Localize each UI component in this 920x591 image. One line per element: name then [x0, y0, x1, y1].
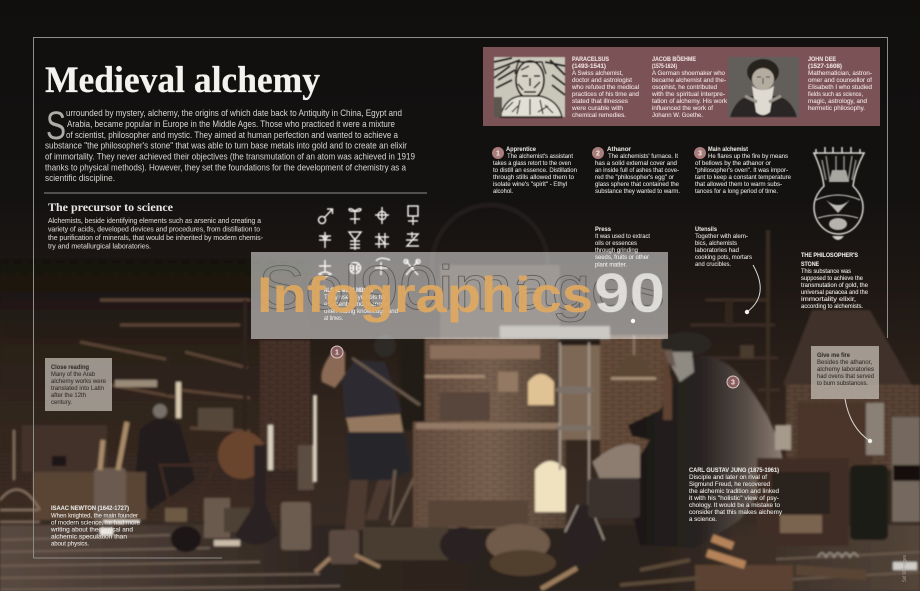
note: Carl Gustav Jung: Disciple and later on rival of — [689, 474, 767, 481]
callout: close reading: after the 12th — [51, 392, 87, 399]
callout: close reading: century. — [51, 399, 72, 406]
floor planks — [0, 520, 920, 591]
portrait: John Dee — [728, 57, 799, 117]
callout: give me fire: Give me fire — [817, 352, 851, 359]
numbered note: apprentice — [492, 146, 578, 195]
note: press: It was used to extract — [595, 233, 650, 240]
furnace glowing windows — [528, 374, 566, 512]
text: John Dee — [808, 56, 873, 112]
note: press: through grinding — [595, 247, 639, 254]
symbol: wheel — [350, 262, 361, 273]
numbered note: main alchemist — [694, 146, 792, 195]
bright pot at hands — [588, 444, 640, 518]
left shelves with books — [80, 300, 250, 450]
note: alchemic symbols: ALCHEMIC SYMBOLS — [324, 287, 373, 294]
note: the philosopher's stone: supposed to achieve the — [801, 275, 864, 282]
numbered note: apprentice: Apprentice — [506, 146, 537, 153]
numbered note: main alchemist: 3 — [698, 150, 702, 158]
numbered note: athanor: The alchemists' furnace. It — [608, 153, 678, 160]
text: Jacob Böehme: tation of alchemy. His work — [652, 98, 728, 105]
note: alchemic symbols: They used symbols for — [324, 294, 386, 301]
text: John Dee: (1527-1608) — [808, 63, 842, 70]
numbered note: main alchemist: tant to keep a constant temperature — [695, 174, 792, 181]
bottle and metal can on right — [775, 403, 920, 540]
stick on floor — [541, 568, 577, 589]
section body: variety of acids, developed devices and procedures, from distillation to — [48, 226, 260, 234]
note: press: seeds, fruits or other — [595, 254, 649, 261]
note: alchemic symbols — [324, 287, 399, 322]
symbol: scissors cross — [404, 260, 420, 275]
note: Carl Gustav Jung: it with his "holistic" view of psy- — [689, 495, 779, 502]
note: press: oils or essences — [595, 240, 637, 247]
text: John Dee: Elisabeth I who studied — [808, 84, 873, 91]
furnace step — [363, 527, 448, 560]
note: Isaac Newton: When knighted, the main founder — [51, 512, 138, 520]
note: Carl Gustav Jung: Sigmund Freud, he recovered — [689, 481, 771, 488]
hanging lamp — [611, 335, 656, 380]
text: Jacob Böehme: influenced the work of — [652, 105, 713, 112]
note: the philosopher's stone — [801, 252, 869, 310]
numbered note: apprentice: takes a glass retort to the oven — [493, 160, 572, 167]
credit: Sol 90 Images — [902, 555, 908, 582]
callout: give me fire: had ovens that served — [817, 373, 875, 380]
apprentice mortar and sticks — [315, 530, 380, 572]
symbol: hash — [375, 233, 389, 248]
note: Isaac Newton: writing about theological and — [50, 526, 134, 534]
note: utensils: Together with alem- — [695, 233, 748, 240]
note: press: plant matter. — [595, 262, 627, 268]
text: Paracelsus — [571, 56, 640, 119]
numbered note: athanor: red the "philosopher's egg" or — [595, 174, 674, 181]
note: utensils: laboratories had — [695, 247, 740, 254]
leader line: give me fire — [845, 399, 872, 443]
note: Isaac Newton: of modern science, he had more — [51, 520, 141, 526]
note: Carl Gustav Jung: chology. It would be a mistake to — [689, 502, 781, 509]
note: the philosopher's stone: according to alchemists. — [801, 303, 863, 310]
numbered note: apprentice: to distill an essence. Distillation — [493, 167, 578, 174]
note: press: Press — [595, 226, 612, 233]
intro text block: scientific discipline. — [45, 173, 115, 183]
portrait: Paracelsus engraving — [494, 57, 565, 117]
text: John Dee: fields such as science, — [808, 91, 863, 98]
text: Paracelsus: chemical remedies. — [572, 112, 626, 119]
text: Jacob Böehme: JACOB BÖEHME — [652, 56, 696, 63]
back wall and faint dome — [0, 205, 670, 520]
text: Paracelsus: PARACELSUS — [572, 56, 609, 63]
section body: try and metallurgical laboratories. — [48, 244, 151, 250]
numbered note: athanor — [592, 146, 680, 195]
numbered note: main alchemist: of bellows by the athanor or — [695, 160, 771, 167]
intro text block: urrounded by mystery, alchemy, the origins of which date back to Antiquity in China, Egypt and — [66, 108, 402, 118]
note: utensils: cooking pots, mortars — [695, 254, 752, 261]
text: John Dee: magic, astrology, and — [808, 98, 868, 105]
text: Jacob Böehme: osophist, he contributed — [652, 84, 718, 91]
round flask — [562, 505, 606, 568]
watermark number: 90 — [594, 261, 665, 324]
text: John Dee: Mathematician, astron- — [808, 70, 872, 77]
text: Paracelsus: A Swiss alchemist, — [572, 70, 623, 77]
watermark panel — [251, 252, 668, 339]
marker 1 on apprentice — [331, 346, 343, 358]
note: press — [595, 226, 650, 268]
numbered note: main alchemist: that allowed them to warm subs- — [695, 181, 782, 188]
callout: give me fire: to burn substances. — [817, 380, 868, 387]
numbered note: athanor: substance they wanted to warm. — [595, 188, 680, 195]
left candles — [176, 382, 273, 470]
numbered note: apprentice: The alchemist's assistant — [507, 153, 573, 160]
note: Isaac Newton — [50, 505, 141, 548]
apprentice tall candle — [313, 395, 317, 482]
watermark orange word: Infographics — [257, 267, 593, 323]
title: Medieval alchemy — [45, 60, 320, 101]
note: the philosopher's stone: STONE — [801, 261, 819, 268]
intro text block: of scientist, philosopher and mystic. They aimed at human perfection and wanted to achieve a — [66, 130, 399, 140]
main alchemist in robe — [625, 332, 783, 548]
callout: give me fire: Besides the athanor, — [817, 359, 872, 366]
callout: give me fire — [811, 346, 879, 399]
note: the philosopher's stone: universal panacea and the — [801, 289, 869, 296]
press leader dot — [631, 319, 635, 323]
numbered note: apprentice: 1 — [496, 150, 500, 158]
note: utensils: Utensils — [695, 226, 718, 233]
note: alchemic symbols: at times. — [324, 315, 343, 322]
callout: close reading: Close reading — [51, 364, 89, 371]
callout: close reading: Many of the Arab — [51, 371, 96, 378]
note: the philosopher's stone: This substance was — [801, 268, 851, 275]
numbered note: athanor: Athanor — [607, 146, 632, 153]
note: Carl Gustav Jung — [689, 467, 783, 523]
note: the philosopher's stone: transmutation of gold, the — [801, 282, 869, 289]
intro text block — [45, 104, 415, 183]
note: alchemic symbols: elements and planets, — [324, 301, 389, 308]
numbered note: athanor: 2 — [596, 150, 600, 158]
symbol: mound cross — [319, 260, 331, 277]
intro text block: Arabia, became popular in Europe in the Middle Ages. Those who practiced it were a mixture — [67, 119, 395, 129]
apprentice figure — [321, 335, 420, 530]
symbol: hook cross — [375, 258, 390, 275]
text: John Dee: omer and counsellor of — [808, 77, 872, 84]
note: Carl Gustav Jung: CARL GUSTAV JUNG (1875-1961) — [689, 467, 779, 474]
fireplace — [783, 310, 920, 472]
numbered note: main alchemist: tances for a long period of time. — [695, 188, 778, 195]
illustration: alchemist laboratory scene — [0, 205, 920, 591]
note: utensils — [695, 226, 752, 268]
seated scholar — [135, 404, 215, 510]
text: Jacob Böehme: A German shoemaker who — [652, 70, 726, 77]
marker 1 on apprentice: 1 — [335, 350, 339, 356]
metal stand with trays — [555, 342, 600, 505]
callout: give me fire: alchemy laboratories — [817, 366, 874, 373]
note: Isaac Newton: about physics. — [51, 540, 89, 548]
numbered note: athanor: has a solid external cover and — [595, 160, 678, 167]
jar with scrolls — [94, 422, 127, 530]
numbered note: apprentice: isolate wine's "spirit" - Ethyl — [493, 181, 567, 188]
wooden table — [757, 458, 849, 546]
callout: close reading: alchemy works were — [51, 378, 107, 385]
furnace — [413, 338, 566, 528]
note: alchemic symbols: often hiding knowledge and — [324, 308, 399, 315]
text: Jacob Böehme: with the spiritual interpre- — [651, 91, 725, 98]
stacked books and scrolls — [620, 535, 917, 591]
text: Paracelsus: stated that illnesses — [572, 98, 628, 105]
symbol: mars — [319, 209, 332, 223]
drop cap: S — [46, 104, 66, 148]
right shelves — [690, 230, 780, 440]
numbered note: athanor: glass sphere that contained the — [595, 181, 680, 188]
numbered note: apprentice: through stills allowed them to — [493, 174, 575, 181]
intro text block: substance "the philosopher's stone" that was able to turn base metals into gold and to create an elixir — [45, 140, 407, 150]
intro text block: thanks to physical methods). However, they set the foundations for the development of chemistry as a — [45, 162, 407, 172]
text: Paracelsus: practices of his time and — [572, 91, 640, 98]
note: Isaac Newton: ISAAC NEWTON (1642-1727) — [51, 505, 129, 512]
marker 3 on main alchemist — [727, 376, 739, 388]
text: Jacob Böehme — [651, 56, 728, 119]
note: the philosopher's stone: immortality elixir, — [801, 296, 856, 303]
text: Paracelsus: (1493-1541) — [572, 63, 606, 70]
section body: the purification of minerals, that would be inherited by modern chemis- — [48, 235, 264, 242]
text: Jacob Böehme: Johann W. Goethe. — [652, 112, 703, 119]
note: Carl Gustav Jung: a science. — [689, 516, 717, 523]
text: Paracelsus: were curable with — [571, 105, 624, 112]
note: utensils: and crucibles. — [695, 261, 731, 268]
section heading: The precursor to science — [48, 200, 174, 214]
marker 3 on main alchemist: 3 — [731, 380, 735, 386]
text: Paracelsus: who refuted the medical — [571, 84, 639, 91]
alchemical symbols — [319, 206, 420, 277]
text: John Dee: JOHN DEE — [808, 56, 836, 63]
globe and small vessels — [165, 431, 314, 552]
symbol: zeta cross — [406, 232, 419, 246]
note: Carl Gustav Jung: consider that this makes alchemy — [689, 509, 783, 516]
text: John Dee: hermetic philosophy. — [808, 105, 865, 112]
section: the precursor to science — [48, 200, 264, 250]
callout: close reading — [45, 358, 112, 411]
symbol: circled cross — [375, 207, 389, 224]
icon: philosopher's stone vessel — [813, 147, 865, 240]
bowls and dark pot — [440, 524, 556, 576]
numbered note: main alchemist: Main alchemist — [708, 146, 748, 153]
symbol: double bar cross — [319, 232, 331, 248]
divider — [44, 192, 427, 194]
note: utensils: bics, alchemists — [695, 240, 737, 247]
leader line: utensils — [745, 265, 760, 314]
section body — [48, 218, 264, 250]
numbered note: main alchemist: He flares up the fire by means — [708, 153, 788, 160]
note: the philosopher's stone: THE PHILOSOPHER'S — [801, 252, 858, 259]
note: Isaac Newton: alchemic speculation than — [51, 534, 128, 540]
armillary stand left — [0, 430, 40, 522]
text: Jacob Böehme: became alchemist and the- — [652, 77, 726, 84]
watermark outline text: Sol90images — [258, 254, 665, 323]
section body: Alchemists, beside identifying elements such as arsenic and creating a — [48, 218, 261, 225]
numbered note: athanor: an inside full of ashes that cove- — [595, 167, 679, 174]
text: Jacob Böehme: (1575-1624) — [652, 63, 677, 70]
numbered note: apprentice: alcohol. — [493, 188, 513, 195]
symbol: square with cross — [408, 206, 418, 225]
symbol: ribbed goblet — [349, 232, 361, 250]
symbol: looped cross — [349, 209, 361, 224]
callout: close reading: translated into Latin — [51, 385, 105, 392]
numbered note: main alchemist: "philosopher's oven". It was impor- — [695, 167, 788, 174]
text: Paracelsus: doctor and astrologist — [572, 77, 632, 84]
chest and crate — [22, 425, 146, 520]
intro text block: of immortality. They never achieved their objectives (the transmutation of an atom was achieved in 1919 — [45, 152, 415, 162]
note: Carl Gustav Jung: the alchemic tradition and linked — [689, 488, 780, 495]
panel: biographies of alchemists — [483, 47, 880, 126]
